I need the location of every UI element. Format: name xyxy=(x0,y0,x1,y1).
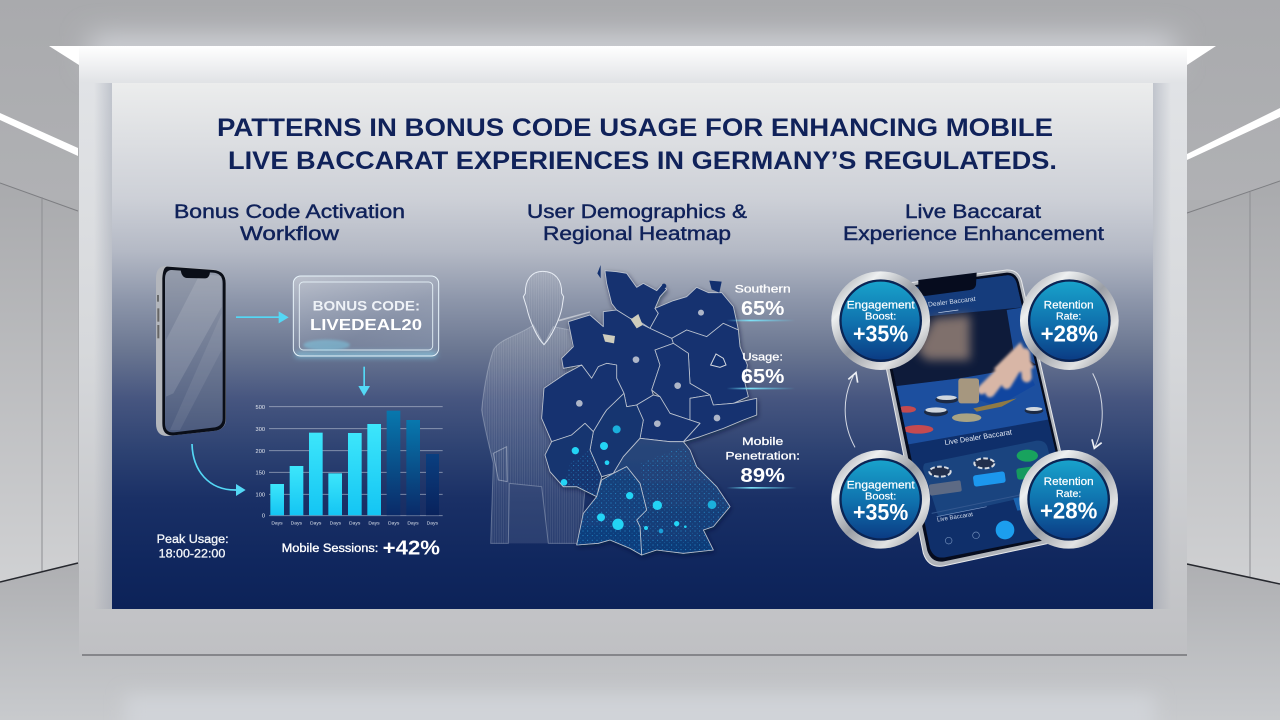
stat: mobile sessions: +42% xyxy=(383,537,440,560)
region: Bavaria xyxy=(613,438,730,555)
x axis labels: Days xyxy=(407,521,419,527)
badge: retention rate bottom xyxy=(1019,450,1118,549)
region: Rhineland-Palatinate xyxy=(545,423,602,497)
coastal islands xyxy=(557,265,722,321)
y axis labels: 300 xyxy=(256,427,265,433)
x axis labels: Days xyxy=(427,521,439,527)
x axis labels: Days xyxy=(349,521,361,527)
region: North Rhine-Westphalia xyxy=(542,363,624,442)
x axis labels: Days xyxy=(330,521,342,527)
heading: demographics xyxy=(527,202,747,245)
header bar xyxy=(916,275,1022,316)
x axis labels: Days xyxy=(271,521,283,527)
region: Saxony-Anhalt xyxy=(652,343,710,420)
chips xyxy=(897,406,933,434)
heatmap texture xyxy=(563,447,730,555)
region: Brandenburg xyxy=(672,323,748,405)
screen text: Dealer Baccarat xyxy=(928,296,976,309)
panel: experience enhancement xyxy=(831,267,1119,567)
stat: mobile penetration xyxy=(725,436,800,489)
y axis labels: 200 xyxy=(256,449,265,455)
stat: mobile sessions: Mobile Sessions: xyxy=(282,541,378,555)
badge: engagement boost bottom xyxy=(831,450,930,549)
arrow: code to chart xyxy=(358,367,370,396)
icon: live dealer smartphone: Live Baccarat xyxy=(937,512,974,524)
title xyxy=(217,114,1057,175)
stat: peak usage: 18:00-22:00 xyxy=(159,546,226,560)
badge: retention rate bottom: Rate: xyxy=(1056,489,1081,500)
regional markers: north xyxy=(576,310,720,427)
x axis labels: Days xyxy=(291,521,303,527)
stat: mobile penetration: 89% xyxy=(740,464,785,487)
regional markers: south hotspots xyxy=(561,425,716,533)
region: Hesse xyxy=(590,393,643,477)
badge: engagement boost top: Boost: xyxy=(865,312,896,323)
badge: retention rate top xyxy=(1020,271,1119,370)
badge: retention rate top: +28% xyxy=(1041,321,1098,347)
region: Schleswig-Holstein xyxy=(605,271,667,328)
panel: demographics and heatmap xyxy=(482,265,800,555)
icon: smartphone xyxy=(156,266,226,436)
badge: retention rate top: Rate: xyxy=(1056,312,1081,323)
heading: demographics: User Demographics & xyxy=(527,202,747,223)
heading: experience enhancement: Experience Enhancement xyxy=(843,224,1105,245)
y axis labels: 500 xyxy=(256,405,265,411)
stat: southern: 65% xyxy=(741,297,784,320)
region: Thuringia xyxy=(637,395,700,442)
table xyxy=(892,365,1055,445)
badge: engagement boost bottom: Engagement xyxy=(847,479,915,491)
y axis labels: 100 xyxy=(256,493,265,499)
heading: bonus code workflow: Workflow xyxy=(240,224,339,245)
panel: activation workflow xyxy=(156,266,443,560)
badge: retention rate top: Retention xyxy=(1044,299,1094,311)
bar chart xyxy=(256,405,443,527)
title: LIVE BACCARAT EXPERIENCES IN GERMANY’S REGULATEDS. xyxy=(228,147,1057,175)
region: Lower Saxony xyxy=(562,310,673,407)
stat: southern xyxy=(727,284,795,321)
heading: experience enhancement xyxy=(843,202,1105,245)
x axis labels xyxy=(271,521,439,527)
arrow: cycle left xyxy=(845,373,858,447)
y axis labels: 0 xyxy=(262,514,265,520)
bonus code card xyxy=(293,276,439,357)
y axis labels xyxy=(256,405,265,520)
badge: engagement boost bottom: Boost: xyxy=(865,492,896,503)
stat: southern: Southern xyxy=(735,284,791,296)
arrow: cycle right xyxy=(1092,373,1102,448)
region: Mecklenburg xyxy=(650,287,738,338)
chip icons and buttons xyxy=(929,450,1041,544)
city-states xyxy=(603,314,726,367)
x axis labels: Days xyxy=(368,521,380,527)
bonus code card: LIVEDEAL20 xyxy=(310,317,422,334)
x axis labels: Days xyxy=(388,521,400,527)
figure: human silhouette xyxy=(482,271,585,543)
stat: mobile penetration: Penetration: xyxy=(725,450,800,462)
badge: engagement boost top: +35% xyxy=(853,321,909,347)
lower panel xyxy=(923,441,1058,517)
region: Saxony xyxy=(683,395,757,442)
stat: usage: Usage: xyxy=(742,352,783,364)
badge: retention rate bottom: Retention xyxy=(1044,476,1094,488)
heading: bonus code workflow xyxy=(174,202,405,245)
stat: mobile sessions xyxy=(282,537,440,560)
stat: usage xyxy=(727,352,795,389)
heading: demographics: Regional Heatmap xyxy=(543,224,731,245)
dealer hand xyxy=(982,345,1032,393)
board xyxy=(112,83,1153,609)
heading: experience enhancement: Live Baccarat xyxy=(905,202,1042,223)
badge: engagement boost top xyxy=(831,271,930,370)
bars xyxy=(270,411,439,515)
stat: peak usage xyxy=(157,532,229,560)
stat: peak usage: Peak Usage: xyxy=(157,532,229,546)
heading: bonus code workflow: Bonus Code Activation xyxy=(174,202,405,223)
bonus code card: BONUS CODE: xyxy=(313,297,420,313)
region: Baden-Wuerttemberg xyxy=(577,467,647,555)
badge: engagement boost bottom: +35% xyxy=(853,499,909,525)
icon: live dealer smartphone: Live Dealer Baccarat xyxy=(944,427,1013,447)
x axis labels: Days xyxy=(310,521,322,527)
stat: usage: 65% xyxy=(741,365,784,388)
choropleth map: Germany xyxy=(542,271,757,555)
y axis labels: 150 xyxy=(256,471,265,477)
dealer photo xyxy=(893,308,1036,386)
stat: mobile penetration: Mobile xyxy=(742,436,783,448)
arrow: phone to code xyxy=(236,311,289,323)
title: PATTERNS IN BONUS CODE USAGE FOR ENHANCING MOBILE xyxy=(217,114,1053,142)
badge: engagement boost top: Engagement xyxy=(847,299,915,311)
wall panel xyxy=(49,46,1216,656)
badge: retention rate bottom: +28% xyxy=(1040,497,1098,523)
arrow: phone to chart xyxy=(192,444,246,496)
icon: live dealer smartphone xyxy=(886,270,1061,567)
